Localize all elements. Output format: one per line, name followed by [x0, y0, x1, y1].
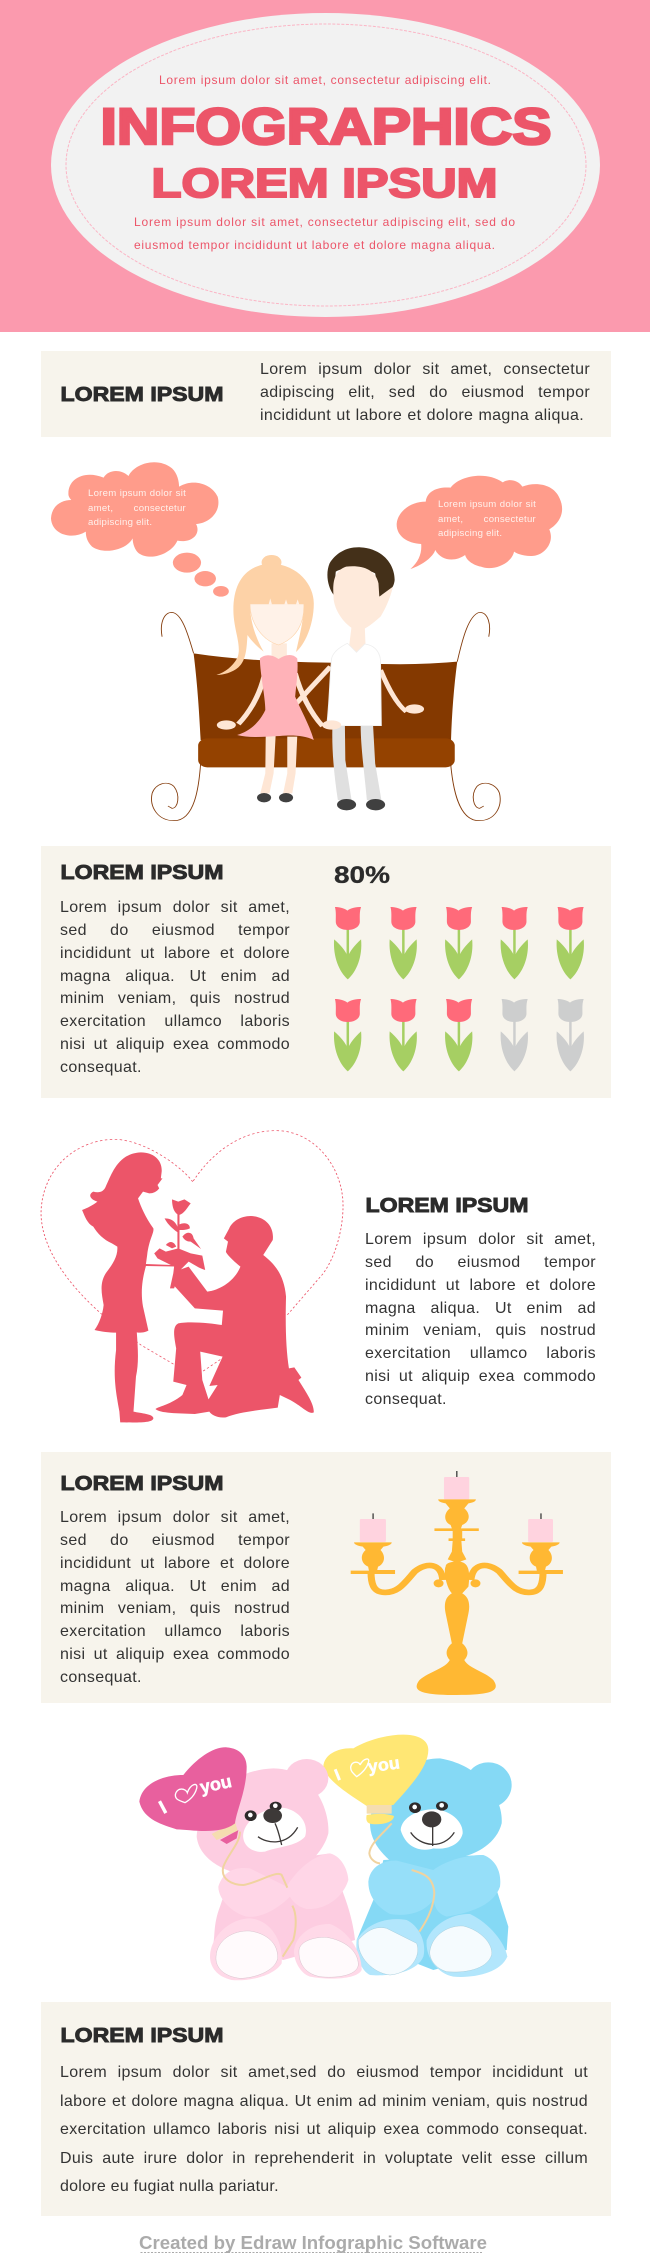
yellow heart balloon	[323, 1735, 434, 1932]
speech cloud text: amet, consectetur	[438, 514, 536, 525]
text block: minim veniam, quis nostrud	[60, 990, 290, 1007]
text block: nisi ut aliquip exea commodo	[60, 1646, 290, 1663]
heading: LOREM IPSUM	[366, 1195, 528, 1217]
heading: LOREM IPSUM	[60, 384, 224, 406]
panel: closing text	[41, 2002, 611, 2216]
text block: magna aliqua. Ut enim ad	[60, 968, 290, 985]
thought cloud text: amet, consectetur	[88, 503, 186, 514]
text block: incididunt ut labore et dolore	[365, 1277, 596, 1294]
illustration: couple on bench	[51, 462, 562, 821]
yellow heart balloon: I	[332, 1767, 343, 1784]
text block: Lorem ipsum dolor sit amet,	[60, 1509, 290, 1526]
text block: Duis aute irure dolor in reprehenderit in voluptate velit esse cillum	[60, 2150, 588, 2167]
text block: Lorem ipsum dolor sit amet, consectetur	[260, 361, 590, 378]
text block: dolore eu fugiat nulla pariatur.	[60, 2178, 279, 2195]
pictogram: tulips 80 percent	[334, 907, 584, 1072]
text block: Lorem ipsum dolor sit amet,	[60, 899, 290, 916]
text block: sed do eiusmod tempor	[365, 1254, 596, 1271]
text block: minim veniam, quis nostrud	[365, 1322, 596, 1339]
text block: exercitation ullamco laboris	[365, 1345, 596, 1362]
blue bear	[356, 1758, 512, 1977]
boy	[296, 547, 424, 810]
speech cloud text: Lorem ipsum dolor sit	[438, 499, 536, 510]
thought cloud	[51, 462, 229, 597]
text block: nisi ut aliquip exea commodo	[365, 1368, 596, 1385]
illustration: candelabra	[350, 1471, 563, 1695]
speech cloud	[397, 476, 562, 569]
thought cloud text: Lorem ipsum dolor sit	[88, 488, 186, 499]
text block	[365, 1231, 596, 1408]
text block: nisi ut aliquip exea commodo	[60, 1036, 290, 1053]
title: INFOGRAPHICS	[100, 98, 552, 155]
text block	[60, 899, 290, 1076]
illustration: proposal silhouette in heart	[40, 1130, 344, 1422]
pink heart balloon: I	[155, 1797, 170, 1818]
text block: consequat.	[60, 1059, 142, 1076]
panel: tulip percentage	[41, 846, 611, 1098]
wicks	[373, 1471, 541, 1519]
heading: LOREM IPSUM	[60, 862, 224, 884]
panel: intro	[41, 351, 611, 437]
text block: labore et dolore magna aliqua. Ut enim ad minim veniam, quis nostrud	[60, 2093, 588, 2110]
text block: incididunt ut labore et dolore	[60, 945, 290, 962]
dashed heart outline	[41, 1131, 343, 1377]
speech cloud text	[438, 499, 536, 539]
candles	[360, 1477, 553, 1542]
text block	[60, 2064, 588, 2195]
header text line one: Lorem ipsum dolor sit amet, consectetur adipiscing elit, sed do	[134, 215, 515, 229]
thought cloud text	[88, 488, 186, 528]
header banner	[0, 0, 650, 332]
text block: Lorem ipsum dolor sit amet,	[365, 1231, 596, 1248]
pink bear	[197, 1759, 362, 1980]
panel: candelabra	[41, 1452, 611, 1703]
text block: exercitation ullamco laboris	[60, 1013, 290, 1030]
girl	[216, 555, 341, 802]
illustration: teddy bears with balloons	[139, 1734, 512, 1980]
candelabra body	[351, 1499, 563, 1695]
heading: LOREM IPSUM	[60, 1473, 224, 1495]
yellow heart balloon: you	[366, 1752, 401, 1777]
woman silhouette	[82, 1152, 182, 1422]
header text line two: eiusmod tempor incididunt ut labore et dolore magna aliqua.	[134, 238, 495, 252]
text block: minim veniam, quis nostrud	[60, 1600, 290, 1617]
header ellipse	[51, 13, 600, 317]
text block: magna aliqua. Ut enim ad	[60, 1578, 290, 1595]
pink heart balloon	[139, 1747, 296, 1957]
man silhouette	[155, 1216, 314, 1418]
heading: LOREM IPSUM	[60, 2025, 224, 2047]
text block	[260, 361, 590, 424]
text block	[60, 1509, 290, 1686]
text block: exercitation ullamco laboris nisi ut aliquip exea commodo consequat.	[60, 2121, 588, 2138]
text block: consequat.	[365, 1391, 447, 1408]
speech cloud text: adipiscing elit.	[438, 528, 502, 539]
text block: Lorem ipsum dolor sit amet,sed do eiusmod tempor incididunt ut	[60, 2064, 588, 2081]
text block: sed do eiusmod tempor	[60, 1532, 290, 1549]
percentage figure: 80%	[334, 862, 390, 889]
footer credit: Created by Edraw Infographic Software	[139, 2233, 487, 2253]
text block: exercitation ullamco laboris	[60, 1623, 290, 1640]
text block: sed do eiusmod tempor	[60, 922, 290, 939]
text block: adipiscing elit, sed do eiusmod tempor	[260, 384, 590, 401]
text block: incididunt ut labore et dolore magna aliqua.	[260, 407, 584, 424]
text block: magna aliqua. Ut enim ad	[365, 1300, 596, 1317]
pink heart balloon: you	[198, 1771, 233, 1797]
text block: incididunt ut labore et dolore	[60, 1555, 290, 1572]
header intro line: Lorem ipsum dolor sit amet, consectetur adipiscing elit.	[159, 73, 491, 87]
rose bouquet	[154, 1199, 205, 1288]
bench	[152, 612, 500, 821]
thought cloud text: adipiscing elit.	[88, 517, 152, 528]
text block: consequat.	[60, 1669, 142, 1686]
subtitle: LOREM IPSUM	[152, 160, 498, 206]
